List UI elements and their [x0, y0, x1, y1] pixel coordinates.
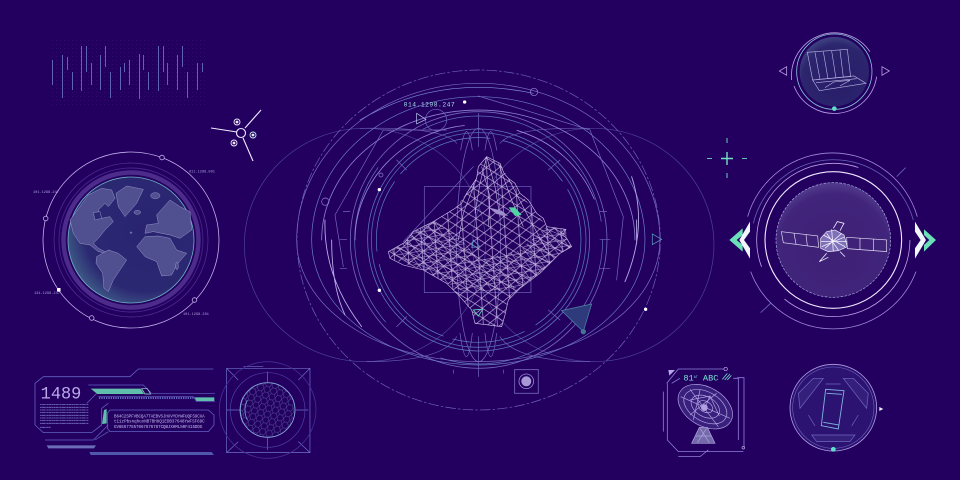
- facets: [798, 378, 868, 442]
- panel: radio dish: [663, 367, 745, 457]
- code text: t11zPbsnqhuoNB7BH8Q1EDB37648YwFSF69C: [114, 420, 205, 425]
- panel: globe: [33, 152, 219, 328]
- icon: tri-blade node: [211, 110, 261, 161]
- globe rings: [43, 152, 219, 328]
- frame: [227, 367, 310, 453]
- side ellipses: [244, 128, 714, 362]
- number 1489: 1489: [41, 385, 81, 404]
- panel: data readout 1489: [35, 369, 215, 455]
- laptop icon: [807, 49, 866, 91]
- fine text: [40, 405, 88, 427]
- frame: [663, 369, 744, 457]
- globe labels: 011.1298.091: [189, 170, 215, 174]
- tall ellipses: [360, 128, 590, 362]
- panel: satellite: [729, 153, 936, 329]
- earth: [68, 177, 194, 303]
- dish: [670, 375, 740, 443]
- label: 81: [683, 374, 694, 384]
- globe labels: 101.1298.281: [183, 313, 209, 317]
- ring nodes: [43, 155, 197, 320]
- panel: laptop: [779, 33, 889, 113]
- panel: central radar: [244, 70, 714, 410]
- code text: [114, 415, 205, 430]
- small square target: [515, 370, 538, 393]
- octagon frame: [335, 87, 623, 377]
- satellite: [781, 222, 887, 262]
- panel frame: [35, 369, 213, 433]
- label: ABC: [698, 374, 719, 384]
- globe labels: 101.1298.247: [33, 191, 59, 195]
- coordinate label: 014.1298.247: [404, 102, 455, 109]
- mesh: [389, 158, 571, 326]
- panel: hex sphere: [219, 362, 316, 458]
- teal bars: [91, 389, 144, 394]
- continents: [70, 186, 192, 292]
- code text: GV8E677857067876787CQBJXHML50F415DDG: [114, 426, 203, 430]
- globe labels: 134.1298.247: [34, 292, 60, 296]
- ring markers: [322, 88, 662, 311]
- concentric rings: [297, 70, 660, 410]
- code box: [107, 410, 214, 432]
- globe labels: [33, 170, 215, 317]
- rings: [748, 153, 917, 329]
- bar chart: vertical signal lines: [52, 40, 206, 106]
- label: AT: [694, 375, 698, 379]
- laptop rings: [800, 37, 869, 106]
- highlight patches: [488, 207, 508, 216]
- scatter square: [424, 187, 531, 293]
- icon: crosshair: [707, 138, 747, 178]
- ridgelines: [388, 157, 572, 327]
- outer arcs: [325, 177, 639, 327]
- chevrons: [729, 222, 936, 259]
- wireframe mountain: [388, 156, 572, 327]
- code text: B64C2SPFVBCQA7TAEBVSJHXVYDYWFUQFS9CXA: [114, 415, 205, 419]
- lower bars: [45, 425, 108, 440]
- phone icon: [821, 389, 844, 429]
- panel: phone: [790, 364, 883, 452]
- triangle cluster: [562, 304, 592, 334]
- sphere: [240, 383, 295, 437]
